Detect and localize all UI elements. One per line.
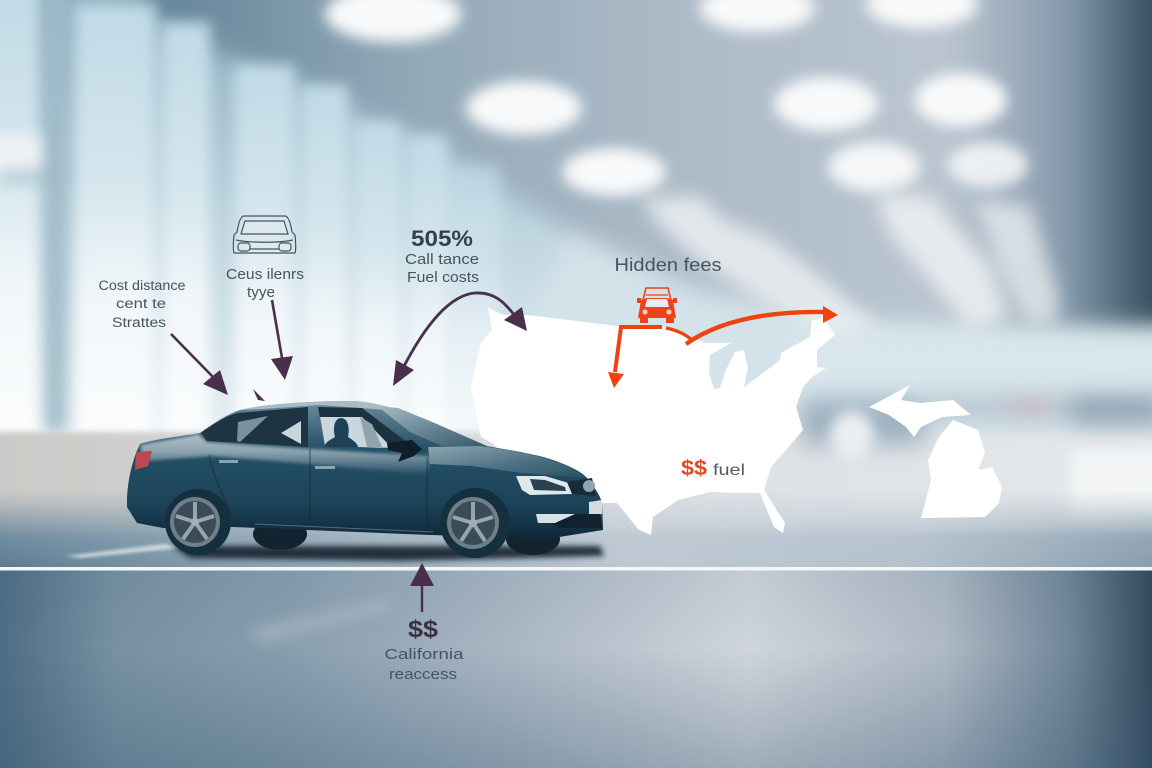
roof highlight <box>240 401 400 411</box>
label: $$ fuel <box>681 457 745 480</box>
door seams <box>209 449 427 534</box>
front windows <box>318 407 412 447</box>
arrow: california cost up to floor line <box>410 563 434 612</box>
label: cost distance: cent te <box>116 296 166 311</box>
label: california: $$ <box>408 616 439 643</box>
tail light <box>135 451 152 470</box>
front wheel <box>440 488 510 558</box>
far side wheels <box>253 518 307 550</box>
label: california: reaccess <box>389 666 457 683</box>
stat: 505%: Call tance <box>405 252 479 268</box>
door handles <box>219 460 238 463</box>
label: california <box>384 616 464 683</box>
car <box>127 401 603 558</box>
shoulder highlight <box>140 434 430 474</box>
label: ceus ilenrs <box>226 267 304 301</box>
grille <box>567 478 596 496</box>
arrows: fuel costs curved double arrow <box>393 293 527 386</box>
body <box>127 401 603 538</box>
label: $$ fuel: $$ <box>681 457 707 480</box>
label: cost distance: Strattes <box>112 315 166 330</box>
floor line <box>0 567 1152 570</box>
stat: 505% <box>405 226 479 286</box>
label: cost distance <box>98 278 186 330</box>
arrow: cost distance to car <box>171 334 265 401</box>
stat: 505%: Fuel costs <box>407 270 479 286</box>
mirror <box>387 440 422 462</box>
label: ceus ilenrs: tyye <box>247 285 275 301</box>
car shadow <box>172 546 604 561</box>
label: california: California <box>384 646 464 663</box>
label: hidden fees: Hidden fees <box>614 255 722 275</box>
label: $$ fuel: fuel <box>713 462 745 479</box>
map: United States <box>471 308 835 535</box>
label: ceus ilenrs: Ceus ilenrs <box>226 267 304 283</box>
rear wheel <box>165 489 231 555</box>
arrow: ceus ilenrs to car <box>271 300 293 380</box>
rear windows <box>201 407 308 447</box>
windshield <box>377 406 487 446</box>
headlight <box>516 476 572 495</box>
icon: car outline <box>233 216 296 253</box>
driver silhouette <box>324 418 358 447</box>
icon: red van <box>637 288 677 323</box>
arrows: hidden fees routes <box>608 306 838 388</box>
label: cost distance: Cost distance <box>98 278 186 293</box>
plate and bumper <box>589 500 602 516</box>
stat: 505%: 505% <box>411 226 473 251</box>
map: Michigan <box>869 385 1002 518</box>
hood <box>428 446 586 478</box>
